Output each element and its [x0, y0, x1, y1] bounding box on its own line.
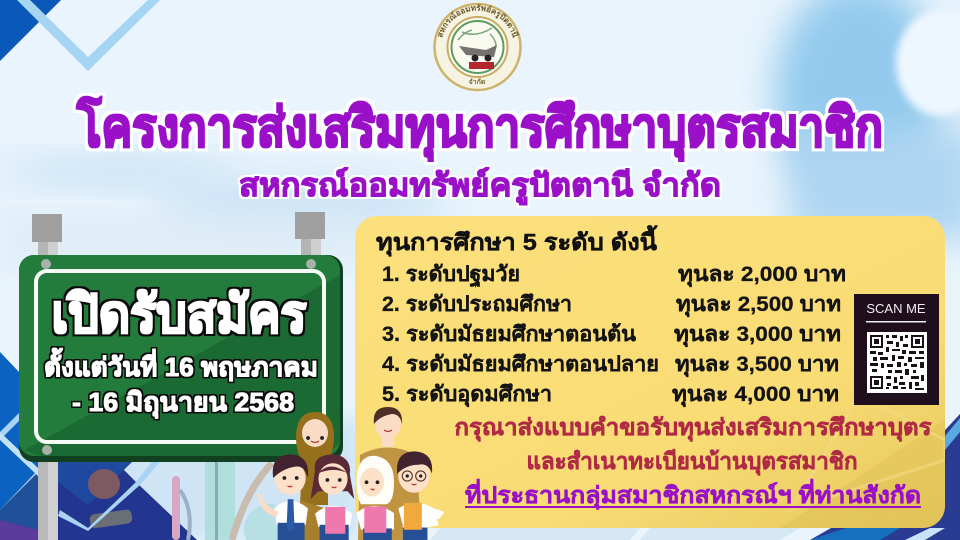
- row 3: [382, 322, 841, 348]
- row 5: ทุนละ 4,000 บาท: [672, 383, 839, 408]
- girl student: [311, 454, 354, 540]
- panel: scholarships: [355, 216, 945, 528]
- row 4: ทุนละ 3,500 บาท: [675, 353, 839, 378]
- instruction line 1: กรุณาส่งแบบคำขอรับทุนส่งเสริมการศึกษาบุตร: [454, 414, 932, 442]
- row 2: 2. ระดับประถมศึกษา: [382, 293, 572, 316]
- logo: จำกัด: [469, 78, 486, 86]
- QR card: SCAN ME: [866, 301, 926, 316]
- bottom-left decoration: [0, 352, 360, 540]
- girl student in hijab: [357, 456, 394, 540]
- row 4: [382, 353, 839, 378]
- row 5: 5. ระดับอุดมศึกษา: [382, 383, 552, 408]
- logo: สหกรณ์ออมทรัพย์ครูปัตตานี: [438, 4, 520, 38]
- people illustration: [258, 407, 444, 540]
- row 4: 4. ระดับมัธยมศึกษาตอนปลาย: [382, 353, 659, 376]
- row 5: [382, 383, 839, 408]
- sign dates line 1: ตั้งแต่วันที่ 16 พฤษภาคม: [44, 347, 318, 382]
- boy student: [258, 454, 308, 540]
- sign headline: เปิดรับสมัคร: [52, 286, 307, 344]
- QR code: [870, 335, 924, 390]
- row 3: 3. ระดับมัธยมศึกษาตอนต้น: [382, 322, 637, 346]
- teacher in hijab: [296, 412, 334, 540]
- sign board: [19, 255, 343, 462]
- QR card: [854, 294, 939, 405]
- instruction line 2: และสำเนาทะเบียนบ้านบุตรสมาชิก: [526, 448, 858, 476]
- logo: [433, 2, 522, 92]
- boy student with glasses: [397, 451, 444, 540]
- instruction line 3: ที่ประธานกลุ่มสมาชิกสหกรณ์ฯ ที่ท่านสังกัด: [465, 478, 921, 510]
- row 1: 1. ระดับปฐมวัย: [382, 263, 520, 288]
- top-left corner shapes: [0, 0, 160, 71]
- row 1: ทุนละ 2,000 บาท: [678, 263, 846, 288]
- bottom-right decoration: [430, 414, 960, 540]
- row 1: [382, 263, 846, 288]
- row 2: ทุนละ 2,500 บาท: [676, 293, 841, 318]
- male teacher: [358, 407, 422, 540]
- sign posts: [32, 212, 325, 540]
- subtitle: สหกรณ์ออมทรัพย์ครูปัตตานี จำกัด: [239, 167, 721, 206]
- green sign: [19, 212, 343, 540]
- sign dates line 2: - 16 มิถุนายน 2568: [72, 387, 294, 419]
- row 2: [382, 293, 841, 318]
- panel heading: ทุนการศึกษา 5 ระดับ ดังนี้: [376, 225, 658, 257]
- row 3: ทุนละ 3,000 บาท: [674, 323, 841, 348]
